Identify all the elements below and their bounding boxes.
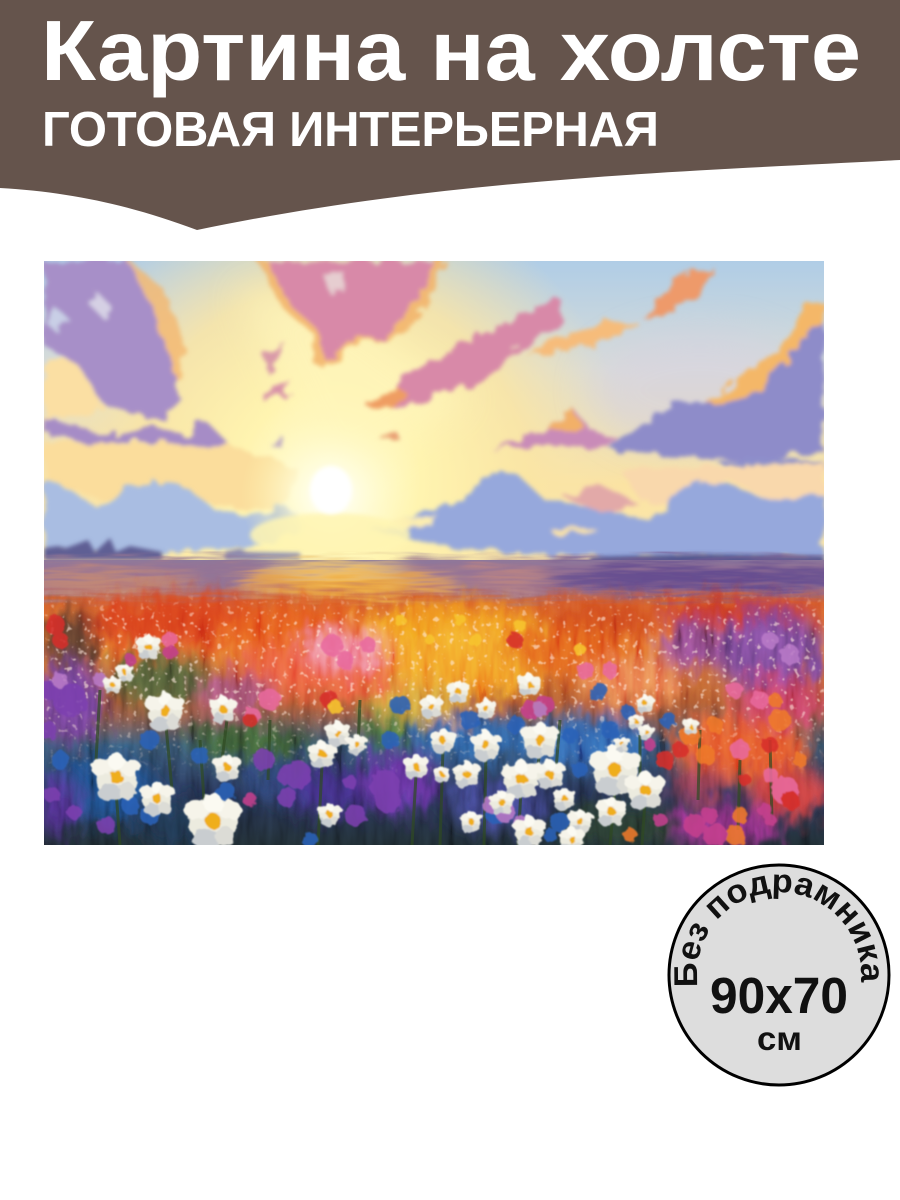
stems — [96, 690, 772, 845]
badge circle — [669, 865, 889, 1085]
badge curved label: Без подрамника — [674, 874, 879, 985]
badge: size without stretcher — [668, 864, 890, 1086]
sun glow — [248, 436, 412, 548]
upper clouds — [44, 261, 824, 510]
flower field base — [44, 560, 824, 845]
sun — [310, 466, 352, 514]
painting: sunset over flower field — [20, 261, 870, 852]
badge size: 90x70 — [710, 967, 848, 1024]
header band — [0, 0, 900, 230]
flower field colour masses — [35, 597, 830, 849]
distant treeline — [44, 536, 824, 560]
lower clouds — [44, 462, 824, 558]
sky background — [44, 261, 824, 571]
subtitle: ГОТОВАЯ ИНТЕРЬЕРНАЯ — [42, 103, 659, 157]
far field band — [20, 562, 870, 596]
title: Картина на холсте — [41, 4, 861, 99]
badge unit: см — [757, 1020, 802, 1057]
small pale flecks — [44, 590, 824, 780]
painterly vertical streaks — [44, 585, 824, 845]
daisies — [91, 634, 699, 852]
coloured blossoms — [39, 614, 807, 848]
